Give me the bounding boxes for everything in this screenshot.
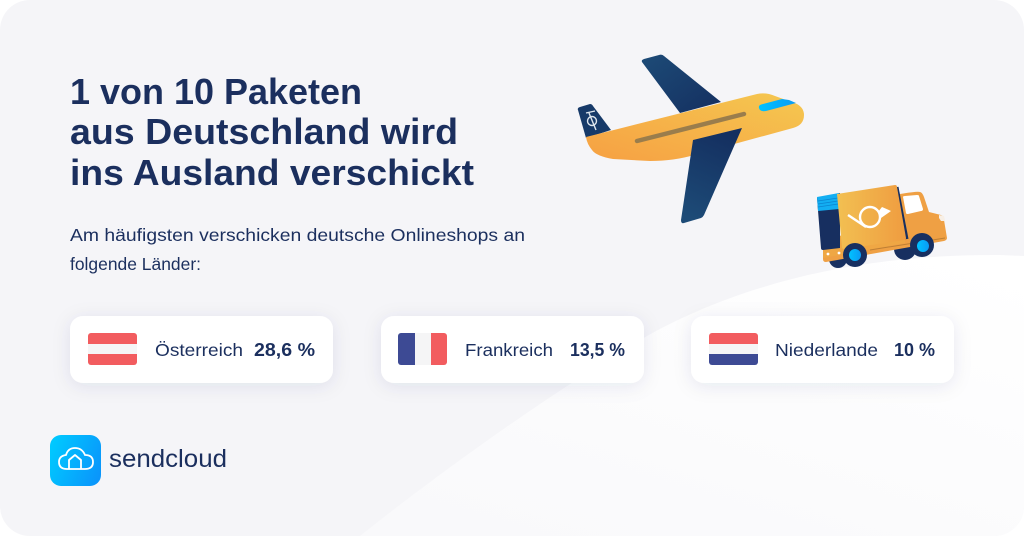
card: Frankreich: 13,5 % (570, 340, 625, 360)
title: aus Deutschland wird (70, 111, 458, 152)
card: Österreich (70, 316, 333, 383)
flag: Netherlands (709, 333, 758, 365)
logo: sendcloud (50, 435, 227, 486)
flag: Austria (88, 333, 137, 365)
title (70, 71, 474, 193)
white hill (694, 255, 1024, 414)
title: 1 von 10 Paketen (70, 71, 362, 112)
subtitle text: Am häufigsten verschicken deutsche Onlineshops an (70, 225, 525, 245)
card: Österreich: 28,6 % (254, 340, 315, 360)
logo: sendcloud: sendcloud (109, 445, 227, 473)
card: Frankreich: Frankreich (465, 340, 553, 360)
icon: cloud (50, 435, 101, 486)
title: ins Ausland verschickt (70, 152, 474, 193)
icon: airplane (578, 55, 804, 223)
subtitle text (70, 225, 525, 274)
flag: France (398, 333, 447, 365)
icon: delivery truck (817, 185, 947, 268)
card: Niederlande: Niederlande (775, 340, 878, 360)
card: Österreich: Österreich (155, 340, 243, 360)
card: Niederlande (691, 316, 954, 383)
card: Niederlande: 10 % (894, 340, 935, 360)
card: Frankreich (381, 316, 644, 383)
subtitle text: folgende Länder: (70, 254, 201, 274)
